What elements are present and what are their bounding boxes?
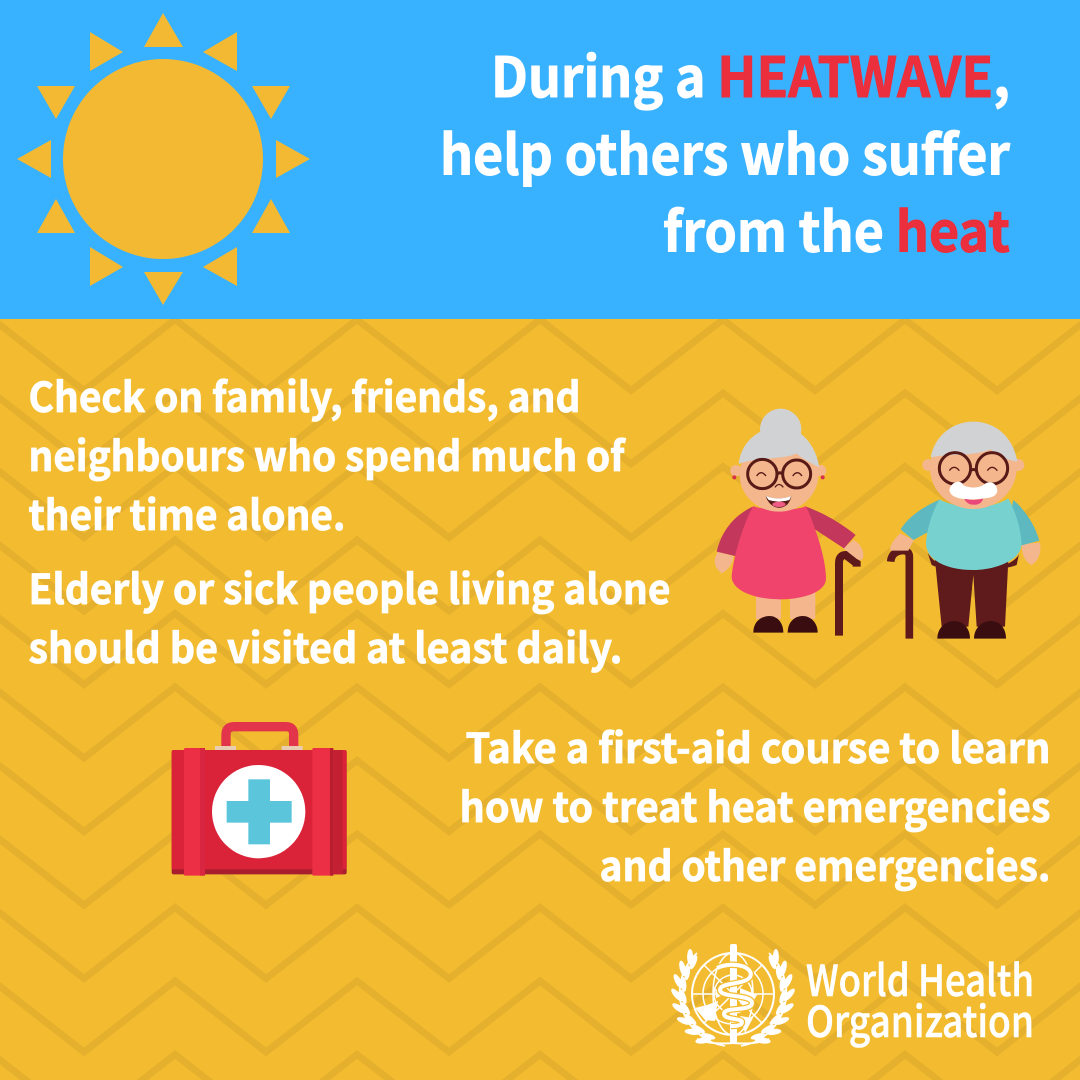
text block: check on family: Check on family, friends, and: [28, 364, 580, 424]
text: organization name: World Health: [806, 947, 1034, 1009]
text block: check on family: [28, 364, 626, 542]
logo: World Health Organization: [669, 944, 1034, 1050]
text block: first-aid course: how to treat heat emergencies: [460, 774, 1050, 834]
icon: sun: [17, 13, 310, 305]
text block: elderly or sick people: [28, 556, 670, 675]
text block: check on family: their time alone.: [28, 482, 346, 542]
title: During a HEATWAVE,: [491, 33, 1010, 113]
icon: staff and serpent: [717, 944, 752, 1043]
text: organization name: [806, 947, 1034, 1050]
title: from the heat: [663, 188, 1010, 268]
icon: first-aid kit: [172, 727, 347, 876]
panel: yellow background: [0, 319, 1080, 1080]
text block: first-aid course: [460, 715, 1050, 893]
panel: blue header: [0, 0, 1080, 319]
icon: elderly man: [890, 422, 1040, 639]
title: help others who suffer: [440, 110, 1011, 190]
title: [440, 33, 1011, 268]
icon: elderly woman: [715, 409, 863, 636]
icon: elderly couple: [715, 409, 1040, 639]
icon: WHO emblem: [669, 944, 797, 1046]
text: organization name: Organization: [806, 988, 1034, 1050]
text block: elderly or sick people: should be visited at least daily.: [28, 615, 622, 675]
text block: first-aid course: and other emergencies.: [600, 833, 1050, 893]
icon: laurel wreath: [669, 949, 797, 1046]
text block: first-aid course: Take a first-aid course to learn: [466, 715, 1050, 775]
text block: check on family: neighbours who spend much of: [28, 423, 626, 483]
text block: elderly or sick people: Elderly or sick people living alone: [28, 556, 670, 616]
